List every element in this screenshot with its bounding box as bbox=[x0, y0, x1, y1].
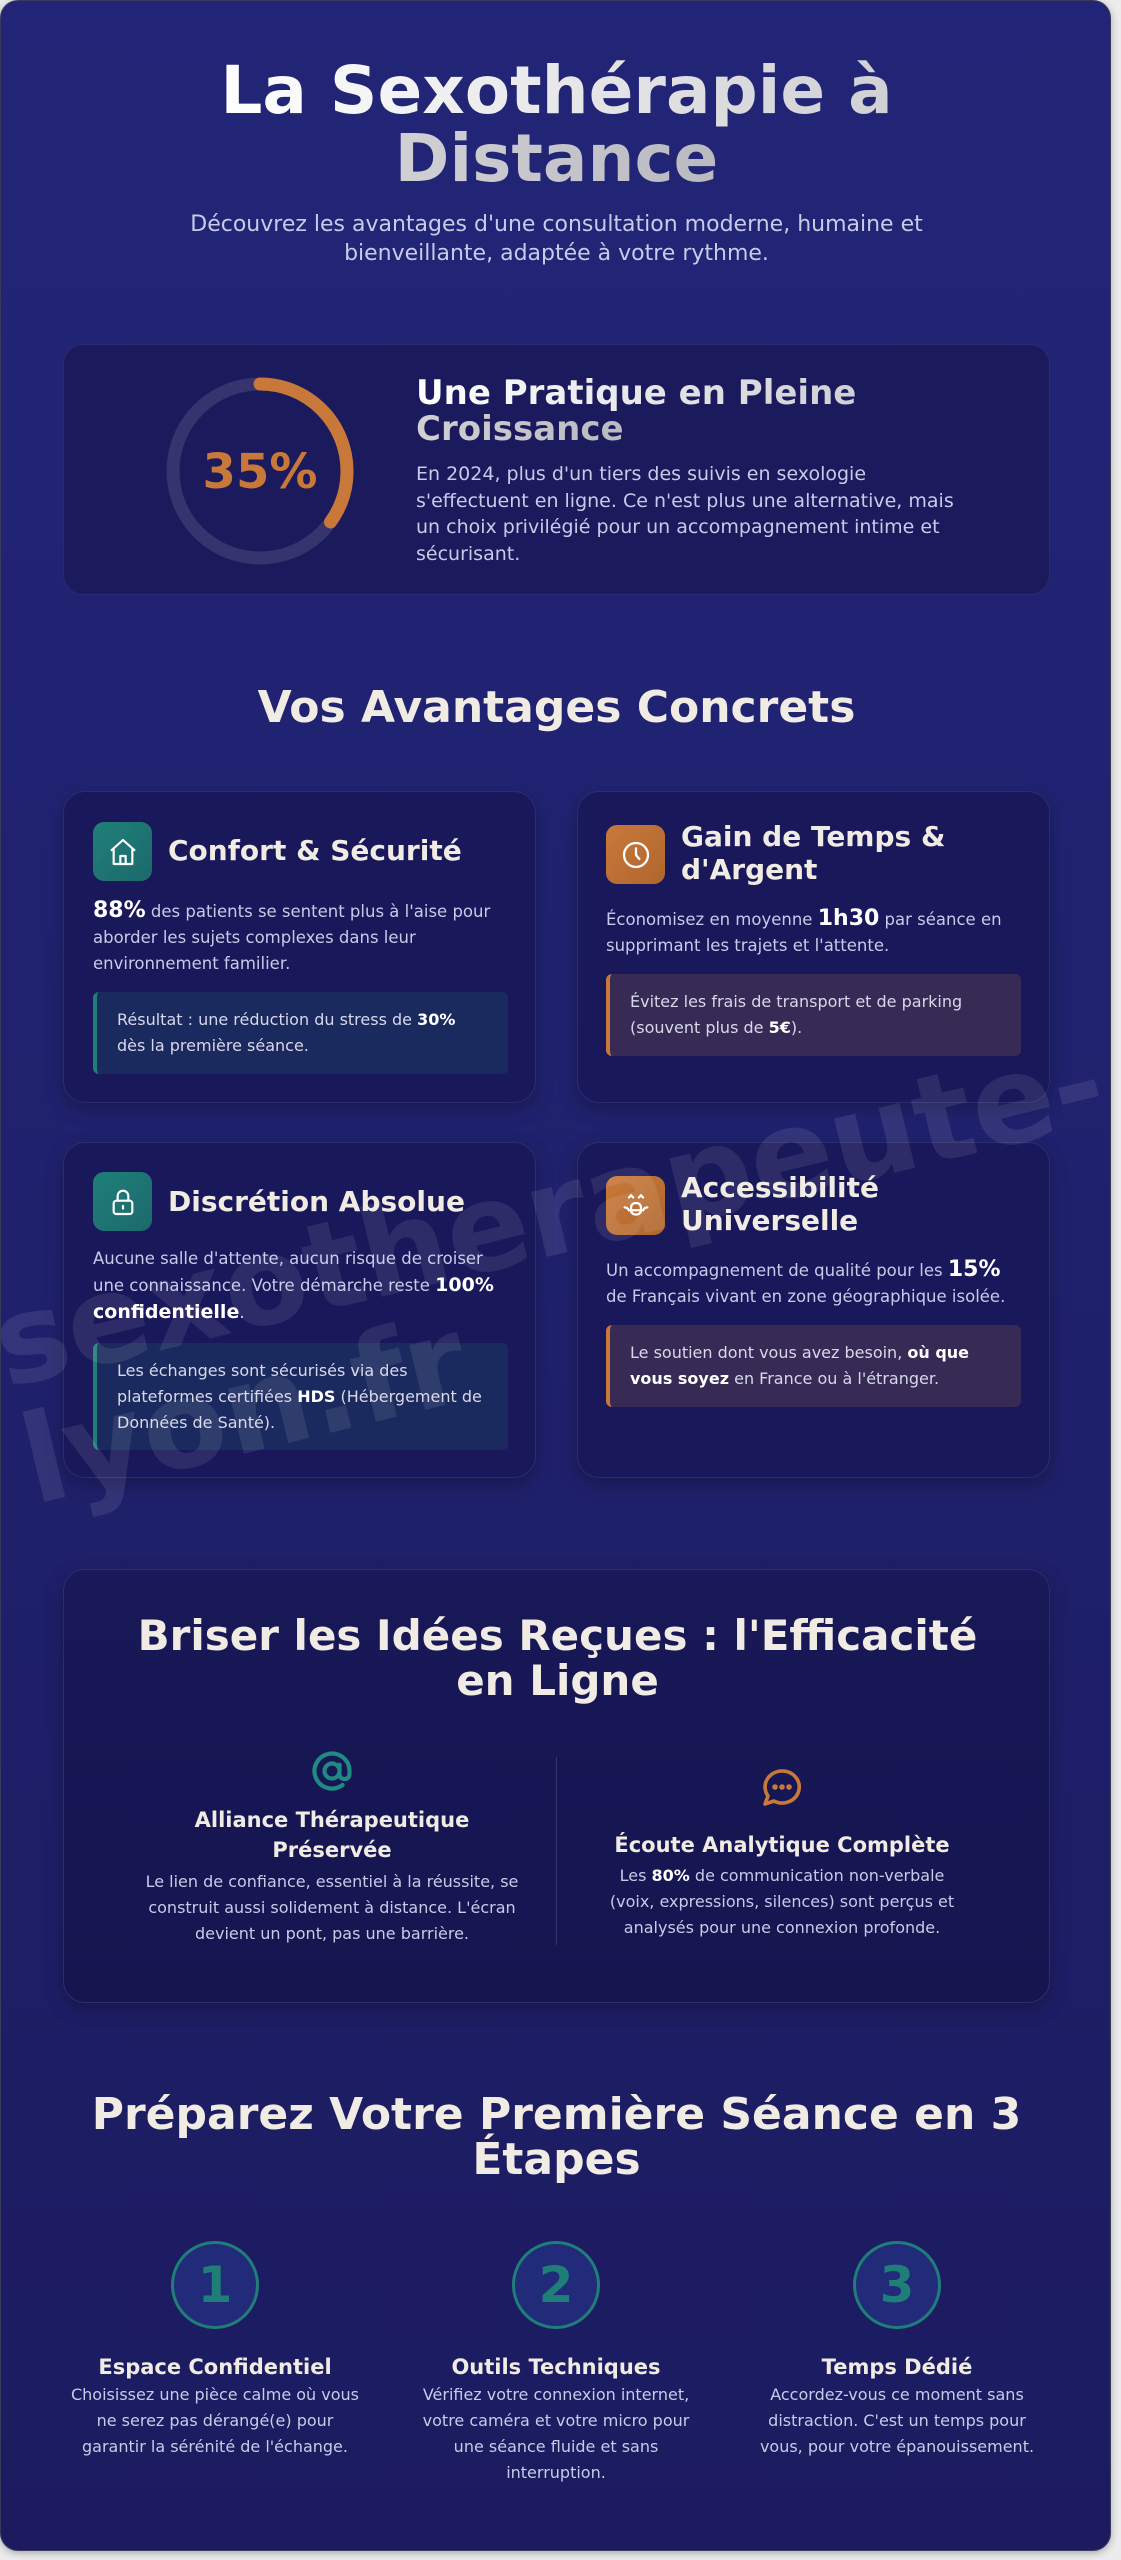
chart: 35% ring bbox=[166, 378, 354, 564]
step title: Outils Techniques bbox=[451, 2355, 661, 2379]
heading bbox=[138, 1611, 977, 1705]
text: Les 80% de communication non-verbale (voix, expressions, silences) sont perçus et analysés pour une connexion profonde. bbox=[610, 1866, 954, 1937]
heading: en Ligne bbox=[456, 1656, 659, 1705]
icon: lock bbox=[93, 1172, 152, 1231]
card title: Gain de Temps & bbox=[681, 820, 945, 853]
subheading: Préservée bbox=[272, 1838, 392, 1862]
panel: confort bbox=[63, 791, 536, 1103]
heading: steps bbox=[92, 2089, 1021, 2185]
title: Distance bbox=[395, 120, 718, 197]
step text: Vérifiez votre connexion internet, votre caméra et votre micro pour une séance fluide et sans interruption. bbox=[423, 2385, 689, 2482]
column: alliance bbox=[146, 1751, 518, 1943]
step text: Choisissez une pièce calme où vous ne serez pas dérangé(e) pour garantir la sérénité de l'échange. bbox=[71, 2385, 359, 2456]
subtitle: Découvrez les avantages d'une consultation moderne, humaine et bbox=[190, 212, 923, 237]
heading: Une Pratique en Pleine bbox=[416, 373, 856, 413]
card title: Accessibilité bbox=[681, 1171, 879, 1204]
step 3 bbox=[760, 2241, 1034, 2456]
title bbox=[220, 52, 893, 197]
number circle: 1 bbox=[198, 2256, 232, 2314]
subheading bbox=[194, 1808, 469, 1862]
panel: temps bbox=[577, 791, 1050, 1103]
panel: accessibilite bbox=[577, 1142, 1050, 1478]
step 1 bbox=[71, 2241, 359, 2456]
number circle: 2 bbox=[539, 2256, 573, 2314]
card title bbox=[681, 1171, 879, 1237]
icon: smile bbox=[606, 1176, 665, 1235]
number circle: 3 bbox=[880, 2256, 914, 2314]
callout: Les échanges sont sécurisés via des plateformes certifiées HDS (Hébergement de Données de Santé). bbox=[117, 1360, 482, 1432]
text: Un accompagnement de qualité pour les 15% de Français vivant en zone géographique isolée. bbox=[606, 1257, 1005, 1306]
text: Économisez en moyenne 1h30 par séance en supprimant les trajets et l'attente. bbox=[606, 906, 1002, 955]
heading: Briser les Idées Reçues : l'Efficacité bbox=[138, 1611, 977, 1660]
heading: steps: Préparez Votre Première Séance en 3 bbox=[92, 2089, 1021, 2140]
subheading: Alliance Thérapeutique bbox=[195, 1808, 469, 1832]
callout bbox=[606, 1325, 1021, 1407]
chart: 35% ring: 35% bbox=[203, 444, 317, 500]
subtitle: bienveillante, adaptée à votre rythme. bbox=[344, 241, 769, 266]
number circle bbox=[853, 2241, 941, 2329]
text: Le lien de confiance, essentiel à la réussite, se construit aussi solidement à distance. L'écran devient un pont, pas une barrière. bbox=[146, 1872, 518, 1943]
step title: Temps Dédié bbox=[822, 2355, 972, 2379]
card title bbox=[681, 820, 945, 886]
card title: Confort & Sécurité bbox=[168, 834, 462, 867]
heading: steps: Étapes bbox=[472, 2134, 641, 2185]
text: 88% des patients se sentent plus à l'aise pour aborder les sujets complexes dans leur environnement familier. bbox=[93, 898, 490, 973]
icon: at bbox=[312, 1751, 352, 1791]
heading bbox=[416, 373, 856, 449]
card title: Universelle bbox=[681, 1204, 858, 1237]
text: Aucune salle d'attente, aucun risque de croiser une connaissance. Votre démarche reste 100% confidentielle. bbox=[93, 1249, 494, 1323]
column: ecoute bbox=[610, 1769, 954, 1937]
callout: dès la première séance. bbox=[117, 1036, 309, 1055]
panel: myths bbox=[63, 1569, 1050, 2003]
callout: Le soutien dont vous avez besoin, où que vous soyez en France ou à l'étranger. bbox=[630, 1343, 969, 1388]
title: La Sexothérapie à bbox=[220, 52, 893, 129]
icon: house bbox=[93, 822, 152, 881]
subtitle bbox=[190, 212, 923, 266]
number circle bbox=[512, 2241, 600, 2329]
icon: chat bubble bbox=[763, 1769, 802, 1806]
watermark: sexotherapeute- bbox=[0, 1010, 1111, 1416]
number circle bbox=[171, 2241, 259, 2329]
step 2 bbox=[423, 2241, 690, 2482]
divider bbox=[556, 1757, 557, 1945]
callout: Résultat : une réduction du stress de 30% bbox=[117, 1010, 455, 1029]
callout bbox=[93, 1343, 508, 1450]
panel: stat growth bbox=[63, 344, 1050, 595]
heading: advantages: Vos Avantages Concrets bbox=[258, 682, 855, 733]
card title: d'Argent bbox=[681, 853, 817, 886]
callout: Évitez les frais de transport et de parking (souvent plus de 5€). bbox=[630, 992, 962, 1037]
callout bbox=[606, 974, 1021, 1056]
heading: Croissance bbox=[416, 409, 624, 449]
watermark: lyon.fr bbox=[8, 1288, 480, 1532]
subheading: Écoute Analytique Complète bbox=[614, 1833, 950, 1857]
text: En 2024, plus d'un tiers des suivis en sexologie s'effectuent en ligne. Ce n'est plus une alternative, mais un choix privilégié pour un accompagnement intime et sécurisant. bbox=[416, 463, 954, 564]
panel: discretion bbox=[63, 1142, 536, 1478]
icon: clock bbox=[606, 825, 665, 884]
callout bbox=[93, 992, 508, 1074]
step text: Accordez-vous ce moment sans distraction. C'est un temps pour vous, pour votre épanouissement. bbox=[760, 2385, 1034, 2456]
step title: Espace Confidentiel bbox=[98, 2355, 332, 2379]
card title: Discrétion Absolue bbox=[168, 1185, 465, 1218]
